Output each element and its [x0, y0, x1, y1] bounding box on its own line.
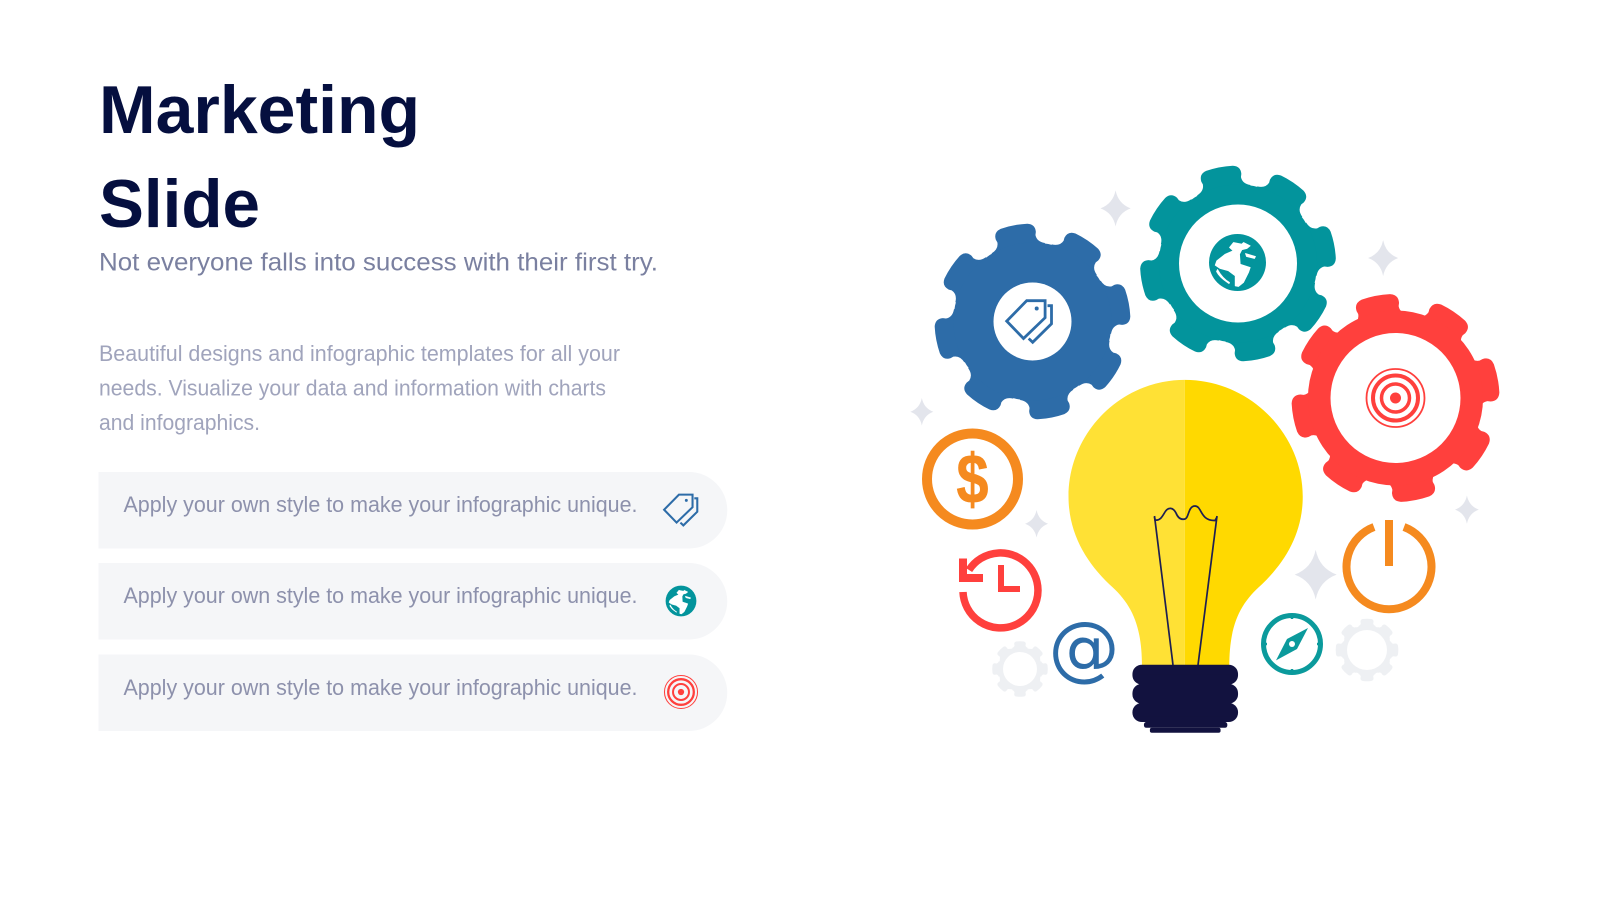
- icon: power button: [1347, 520, 1432, 609]
- icon: target in gear: [1366, 369, 1424, 427]
- panel: pill row 3: Apply your own style to make your infographic unique.: [124, 675, 638, 700]
- title: [99, 72, 420, 242]
- gear: red: [1274, 276, 1517, 520]
- icon: at sign: @: [1048, 606, 1120, 689]
- title: Marketing: [99, 72, 420, 148]
- panel: pill row 3: [98, 654, 727, 731]
- light bulb: [1069, 380, 1303, 733]
- icon: compass: [1262, 614, 1322, 674]
- panel: pill row 1: Apply your own style to make your infographic unique.: [124, 492, 638, 517]
- small gear: left: [992, 641, 1048, 697]
- icon: globe: [666, 586, 696, 616]
- panel: pill row 2: Apply your own style to make your infographic unique.: [124, 583, 638, 608]
- small gear: right: [1336, 619, 1398, 681]
- icon: dollar coin: $: [957, 440, 988, 518]
- body text: and infographics.: [99, 410, 260, 435]
- filament: [1154, 506, 1217, 665]
- decorative sparkles: [910, 190, 1479, 599]
- icon: target: [664, 675, 698, 709]
- title: Slide: [99, 166, 260, 242]
- bulb base: [1132, 665, 1238, 733]
- bulb glass: [1069, 380, 1303, 667]
- panel: pill row 2: [98, 563, 727, 640]
- illustration: light bulb with gears and icons: [910, 149, 1517, 733]
- icon: tag in gear: [1007, 301, 1052, 342]
- body text: needs. Visualize your data and information with charts: [99, 376, 606, 400]
- icon: history clock: [963, 553, 1038, 628]
- body text: [99, 341, 620, 435]
- panel: pill row 1: [98, 472, 727, 548]
- icon: tag: [664, 495, 697, 525]
- gear: blue: [918, 207, 1147, 436]
- icon: globe in gear: [1209, 234, 1266, 291]
- icon: dollar coin: [927, 434, 1018, 524]
- body text: Beautiful designs and infographic templates for all your: [99, 341, 620, 366]
- gear: teal: [1123, 149, 1353, 378]
- subtitle: Not everyone falls into success with their first try.: [99, 248, 658, 276]
